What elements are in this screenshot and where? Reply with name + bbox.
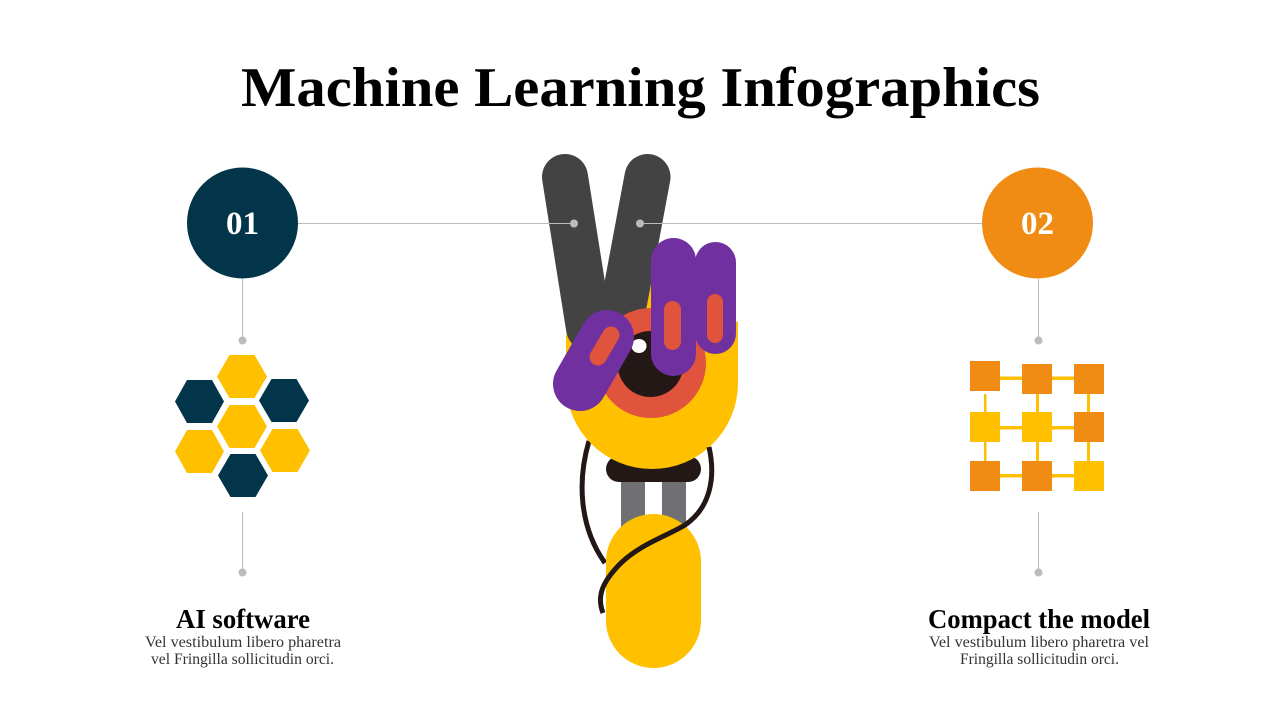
robot neck (606, 456, 701, 482)
right cable (600, 447, 712, 613)
eye (596, 308, 706, 418)
badge 01 (187, 168, 298, 278)
text block: Compact the model (928, 604, 1150, 668)
grey fingers (565, 177, 648, 328)
text block: AI software (145, 604, 341, 668)
badge 02 (982, 168, 1093, 278)
text block: AI software: Vel vestibulum libero pharetra (145, 634, 341, 651)
purple finger right (695, 242, 736, 354)
left cable (582, 441, 605, 563)
illustration: robot hand with eye (565, 177, 738, 668)
robot legs (621, 480, 686, 540)
badge 01: 01 (226, 206, 259, 242)
connector dots (238, 220, 1042, 576)
purple finger left (651, 238, 696, 376)
robot body (606, 514, 701, 668)
text block: AI software: AI software (176, 604, 310, 634)
text block: AI software: vel Fringilla sollicitudin orci. (151, 651, 334, 668)
icon: node grid (970, 361, 1104, 491)
purple thumb (580, 335, 611, 384)
text block: Compact the model: Fringilla sollicitudin orci. (960, 651, 1119, 668)
robot head (566, 282, 738, 469)
icon: hexagon cluster (175, 355, 310, 497)
badge 02: 02 (1021, 206, 1054, 242)
title: Machine Learning Infographics (241, 57, 1040, 119)
text block: Compact the model: Vel vestibulum libero pharetra vel (929, 634, 1149, 651)
text block: Compact the model: Compact the model (928, 604, 1150, 634)
